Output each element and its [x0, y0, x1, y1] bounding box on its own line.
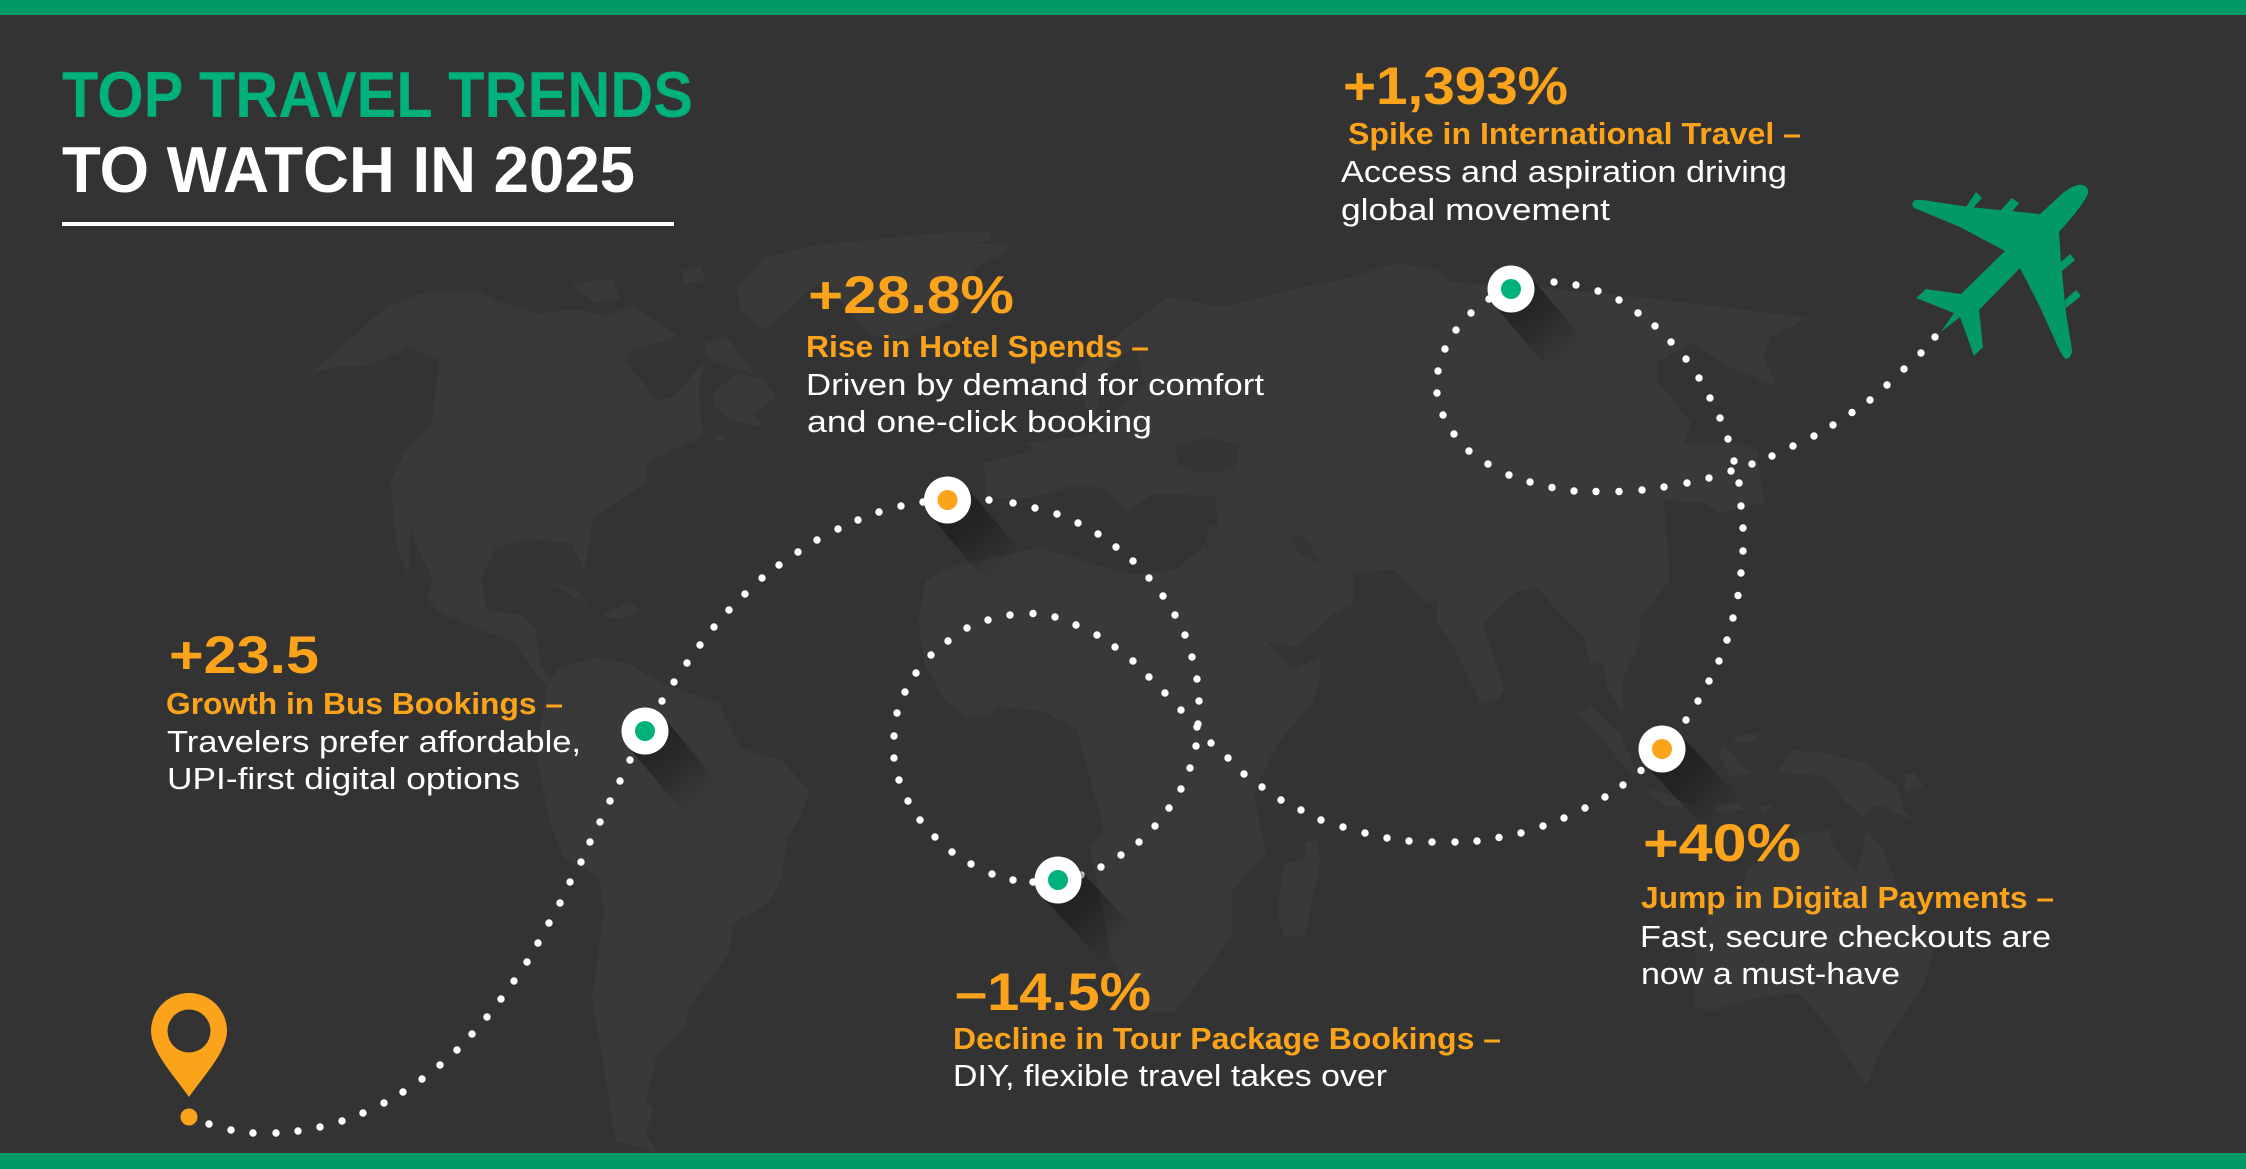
callout: tour packages	[953, 963, 1501, 1093]
marker: international travel	[1488, 266, 1585, 371]
description line 2: now a must-have	[1641, 956, 1900, 991]
stat: +40%	[1643, 814, 1801, 873]
map: inland seas	[1095, 345, 1322, 565]
description line 2: and one-click booking	[807, 404, 1152, 439]
map: north america and arctic islands	[310, 231, 990, 686]
icon: start location pin	[151, 993, 227, 1126]
description line 2: UPI-first digital options	[167, 761, 520, 796]
dotted route	[209, 282, 1935, 1133]
map: madagascar	[1277, 840, 1320, 936]
description line 2: global movement	[1341, 192, 1610, 227]
marker: digital payments	[1638, 726, 1739, 829]
marker: hotel spends	[924, 476, 1022, 582]
map: southeast asia and oceania	[1578, 707, 1935, 1085]
marker: bus bookings	[622, 708, 719, 813]
map: south america	[538, 657, 810, 1153]
description: DIY, flexible travel takes over	[953, 1058, 1387, 1093]
top green bar	[0, 0, 2246, 15]
description: Travelers prefer affordable,	[167, 724, 581, 759]
stat: +28.8%	[808, 266, 1014, 325]
icon: airplane	[1912, 185, 2088, 359]
stat: –14.5%	[955, 963, 1151, 1022]
callout: digital payments	[1640, 814, 2054, 991]
marker: tour packages	[1034, 856, 1135, 960]
description: Fast, secure checkouts are	[1640, 919, 2051, 954]
heading: Rise in Hotel Spends –	[806, 329, 1149, 364]
heading: Spike in International Travel –	[1348, 116, 1801, 151]
heading: Decline in Tour Package Bookings –	[953, 1021, 1501, 1056]
map: africa	[918, 545, 1320, 1012]
callout: hotel spends	[806, 266, 1264, 439]
stat: +23.5	[169, 626, 319, 685]
title underline	[62, 222, 674, 226]
stat: +1,393%	[1343, 57, 1568, 116]
callout: international travel	[1341, 57, 1801, 227]
world map background	[310, 231, 1935, 1153]
heading: Growth in Bus Bookings –	[166, 686, 563, 721]
callout: bus bookings	[166, 626, 581, 796]
title line 1: TOP TRAVEL TRENDS	[62, 58, 693, 131]
title block	[62, 58, 693, 226]
map: eurasia	[984, 263, 1808, 712]
description: Access and aspiration driving	[1341, 154, 1787, 189]
title line 2: TO WATCH IN 2025	[62, 133, 635, 206]
description: Driven by demand for comfort	[806, 367, 1264, 402]
bottom green bar	[0, 1153, 2246, 1169]
heading: Jump in Digital Payments –	[1641, 880, 2054, 915]
map: greenland	[815, 240, 1007, 340]
